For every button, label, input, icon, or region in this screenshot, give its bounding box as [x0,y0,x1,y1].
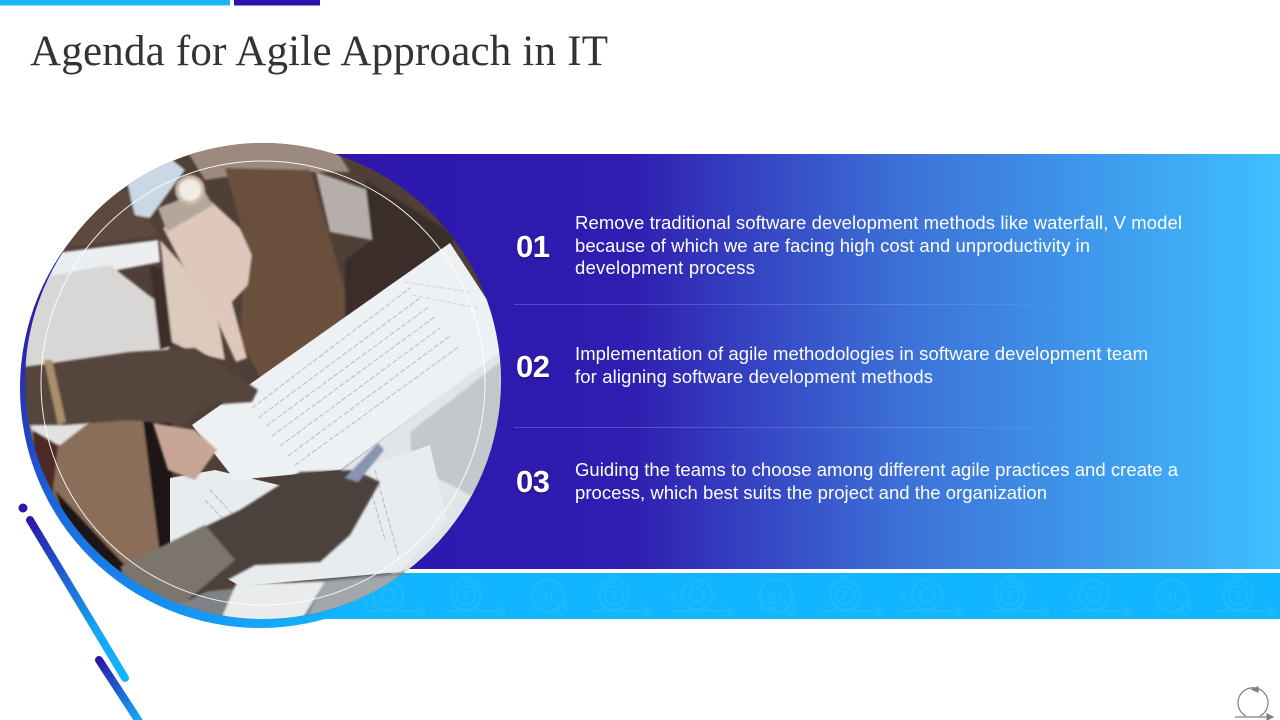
thin white circle outline [41,161,485,605]
agenda item 02 [516,343,1148,387]
icon: agile cycle logo [1235,687,1273,720]
decorative diagonal line long [30,520,125,678]
decorative diagonal line short [99,660,142,720]
text 02 [575,343,1148,387]
sub-element: light hand with watch [158,175,252,362]
text 01: because of which we are facing high cost and unproductivity in [575,235,1090,256]
text 03 [575,459,1179,503]
agenda item 03 [516,459,1179,503]
sub-element: dark hand lower with pen [120,443,384,606]
text 02: Implementation of agile methodologies in software development team [575,343,1148,364]
panel: agenda gradient banner [300,154,1280,569]
panel: light blue icon strip [300,573,1280,619]
blue crescent ring behind photo [20,232,324,628]
sub-element: second paper [170,445,447,586]
top accent bars [0,0,320,6]
number 03: 03 [516,464,550,499]
text 01 [575,212,1182,278]
agenda item 01 [516,212,1182,278]
title: Agenda for Agile Approach in IT [30,28,608,75]
divider [514,304,1094,305]
number 01: 01 [516,229,550,264]
text 03: Guiding the teams to choose among different agile practices and create a [575,459,1179,480]
text 01: Remove traditional software development methods like waterfall, V model [575,212,1182,233]
text 02: for aligning software development methods [575,366,933,387]
sub-element: dark hand upper [25,348,258,480]
sub-element: printed lines on main paper [205,282,478,555]
text 01: development process [575,257,755,278]
decorative dot [18,504,28,512]
text 03: process, which best suits the project and the organization [575,482,1047,503]
number 02: 02 [516,349,550,384]
photo: hands reviewing documents [20,140,510,640]
sub-element: main paper [192,243,510,480]
icons: faint agile pattern [362,576,1276,616]
divider [514,427,1114,428]
